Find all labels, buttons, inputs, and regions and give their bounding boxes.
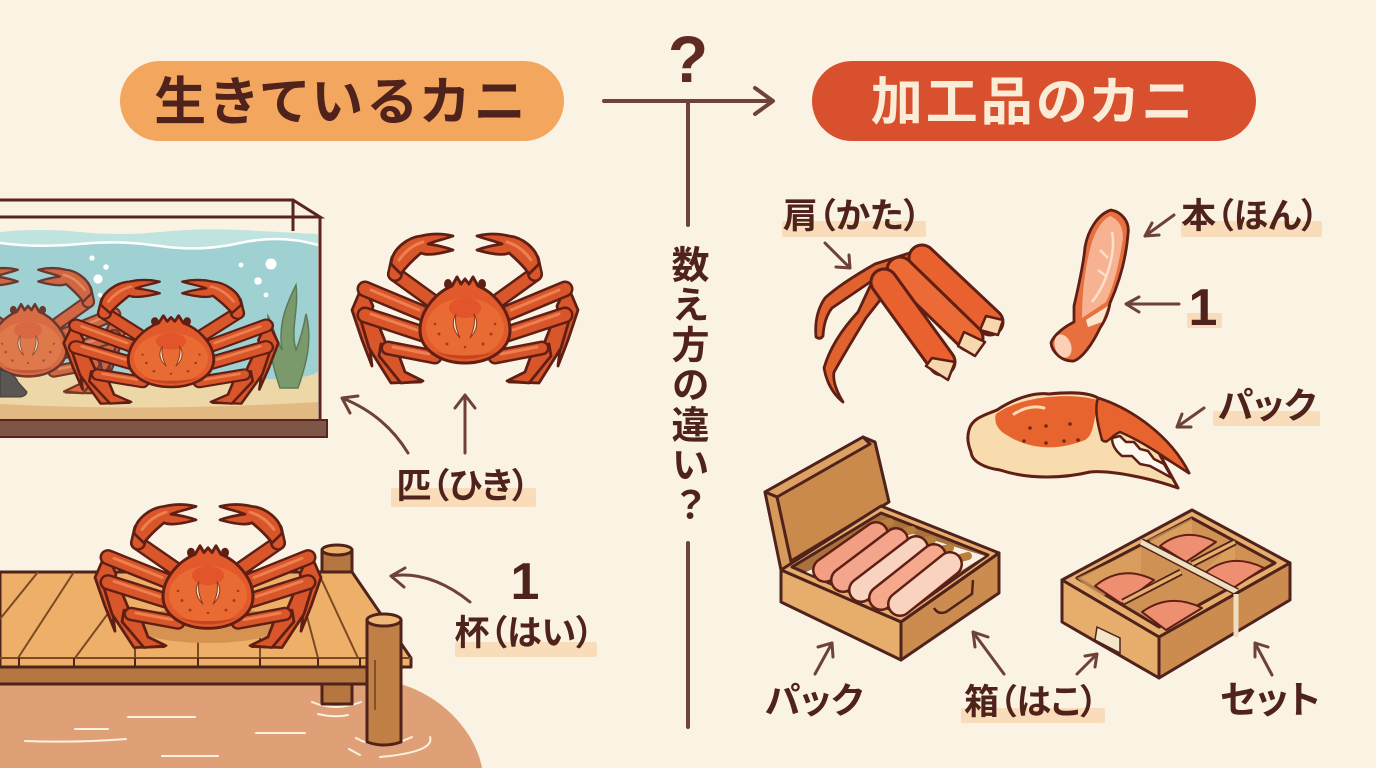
sand <box>0 372 318 420</box>
shoulder legs illustration <box>816 250 1003 402</box>
aquarium illustration <box>0 200 327 437</box>
arrow: number 1 right <box>1126 297 1179 312</box>
number 1 left: 1 <box>511 553 539 611</box>
water <box>0 229 318 380</box>
label: パック upper: パック <box>1218 385 1316 426</box>
base <box>0 420 327 437</box>
front sides <box>1062 580 1159 678</box>
seaweed <box>268 285 309 388</box>
crab shadow <box>133 607 283 643</box>
leg meat illustration <box>1051 210 1128 361</box>
legs <box>825 522 968 604</box>
frame <box>0 200 320 231</box>
arrow to pier crab <box>391 568 470 602</box>
lid <box>765 437 889 567</box>
lower arrows <box>815 632 1272 675</box>
claw illustration <box>968 393 1189 488</box>
bubbles <box>89 255 277 297</box>
heading: processed crab: 加工品のカニ <box>871 74 1195 132</box>
arrow: パック upper <box>1177 408 1204 427</box>
heading: processed crab <box>812 61 1256 141</box>
pier illustration <box>0 505 482 768</box>
heading: live crab: 生きているカニ <box>154 74 530 132</box>
meat portions <box>1095 535 1264 630</box>
back post <box>322 550 352 704</box>
number 1 right: 1 <box>1189 279 1217 337</box>
center question mark and arrow <box>604 22 773 727</box>
label: パック lower: パック <box>765 680 863 721</box>
arrow: 肩 <box>825 243 850 268</box>
vertical center text: 数え方の違い？ <box>665 245 709 525</box>
beam <box>0 667 367 684</box>
left crab <box>0 268 125 393</box>
box top <box>781 506 999 622</box>
sea <box>0 684 482 768</box>
open box illustration <box>765 437 999 660</box>
center question mark and arrow: ? <box>668 22 708 96</box>
front post <box>367 620 401 745</box>
sticker <box>1095 627 1120 653</box>
arrow: 本 <box>1145 215 1174 236</box>
centre crab <box>64 280 278 404</box>
label: 匹: 匹（ひき） <box>396 467 530 506</box>
ripples <box>25 702 430 757</box>
handle <box>934 580 973 613</box>
divided box illustration <box>1062 510 1290 678</box>
heading: live crab <box>120 61 564 141</box>
arrows to live crabs <box>342 395 475 453</box>
label: セット: セット <box>1220 680 1320 722</box>
compartment inner walls <box>1077 518 1235 598</box>
label: 箱: 箱（はこ） <box>964 683 1098 722</box>
label: 本: 本（ほん） <box>1181 197 1319 236</box>
rock <box>0 370 27 397</box>
box sides <box>781 570 901 660</box>
crab <box>95 505 321 648</box>
dividers <box>1141 542 1237 592</box>
label: 杯: 杯（はい） <box>454 614 594 653</box>
label: 肩: 肩（かた） <box>783 197 921 236</box>
deck <box>0 572 411 667</box>
standalone crab <box>352 234 578 383</box>
